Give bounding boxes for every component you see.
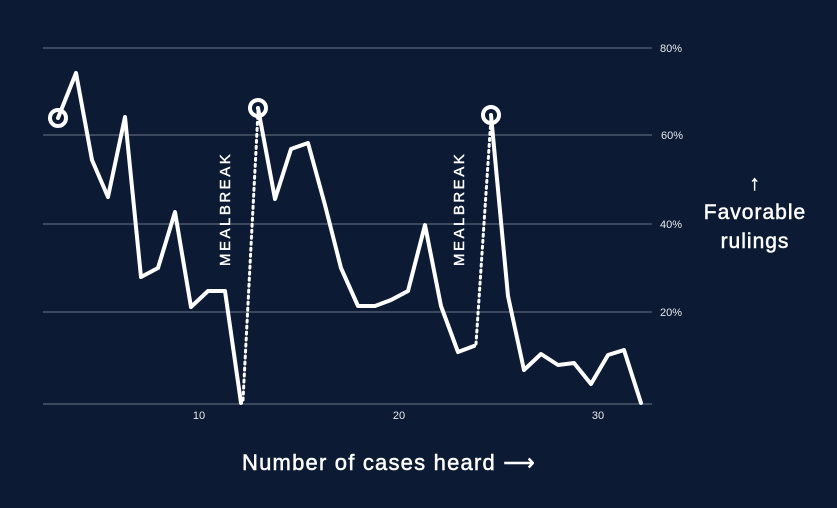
y axis labels	[660, 43, 683, 319]
x axis labels: 10	[193, 410, 205, 422]
y axis labels: 60%	[661, 130, 683, 142]
y axis title: ↑	[749, 172, 761, 195]
x axis title: Number of cases heard ⟶	[242, 450, 536, 475]
dotted meal break connectors	[243, 112, 491, 400]
data line	[58, 73, 641, 403]
mealbreak labels: MEALBREAK	[451, 152, 468, 266]
y axis title: rulings	[721, 230, 789, 253]
mealbreak labels	[217, 152, 468, 266]
y axis labels: 40%	[660, 219, 682, 231]
y axis labels: 80%	[660, 43, 682, 55]
x axis labels: 20	[393, 410, 405, 422]
x axis labels: 30	[592, 410, 604, 422]
mealbreak labels: MEALBREAK	[217, 152, 234, 266]
x axis labels	[193, 410, 604, 422]
y axis title	[704, 172, 806, 253]
y axis labels: 20%	[660, 307, 682, 319]
y axis title: Favorable	[704, 201, 806, 224]
circles	[50, 100, 499, 126]
